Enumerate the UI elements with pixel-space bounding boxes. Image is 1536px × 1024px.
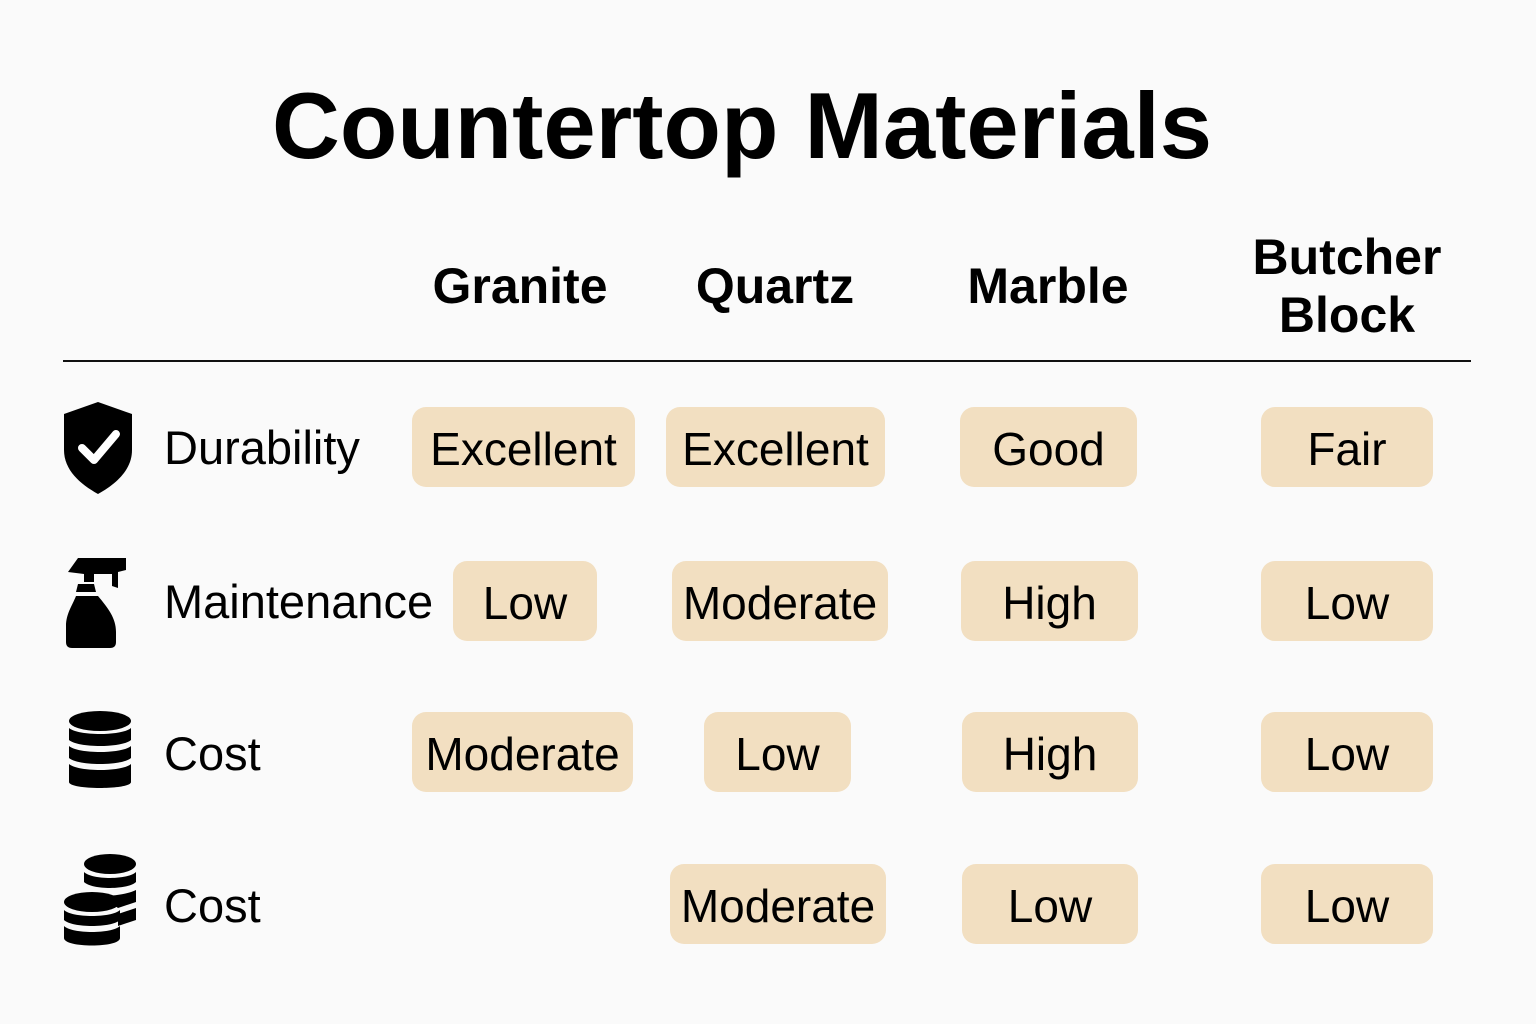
label: Cost 2: Cost	[164, 879, 261, 932]
row: Cost 2 values: Low	[1305, 880, 1389, 932]
row: Durability values: Excellent	[430, 423, 617, 475]
row: Cost values	[412, 712, 1433, 792]
row: Cost values: Moderate	[425, 728, 620, 780]
header: Butcher Block: Butcher	[1253, 229, 1441, 285]
row: Cost 2 values: Low	[1008, 880, 1092, 932]
row: Maintenance values	[453, 561, 1433, 641]
header: Butcher Block	[1253, 229, 1441, 343]
header: Butcher Block: Block	[1279, 287, 1415, 343]
row: Maintenance values: Low	[1305, 577, 1389, 629]
row: Cost values: Low	[735, 728, 820, 780]
row: Durability values	[412, 407, 1433, 487]
header: Quartz: Quartz	[696, 258, 854, 314]
header: Granite: Granite	[432, 258, 608, 314]
header: Marble: Marble	[967, 258, 1129, 314]
row: Durability values: Fair	[1307, 423, 1387, 475]
row: Durability values: Excellent	[682, 423, 869, 475]
row: Cost values: Low	[1305, 728, 1389, 780]
icon: coins	[64, 854, 136, 946]
label: Durability: Durability	[164, 421, 360, 474]
row: Maintenance values: Low	[483, 577, 567, 629]
row: Durability values: Good	[992, 423, 1105, 475]
row: Cost 2 values	[670, 864, 1433, 944]
icon: coin stack	[69, 711, 131, 788]
row: Maintenance values: High	[1002, 577, 1097, 629]
title: Countertop Materials	[272, 73, 1212, 178]
row: Cost values: High	[1003, 728, 1097, 780]
row: Cost 2 values: Moderate	[681, 880, 875, 932]
row: Maintenance values: Moderate	[683, 577, 877, 629]
label: Cost: Cost	[164, 727, 261, 780]
icon: shield	[64, 402, 132, 494]
icon: spray bottle	[66, 558, 126, 648]
label: Maintenance: Maintenance	[164, 575, 433, 628]
